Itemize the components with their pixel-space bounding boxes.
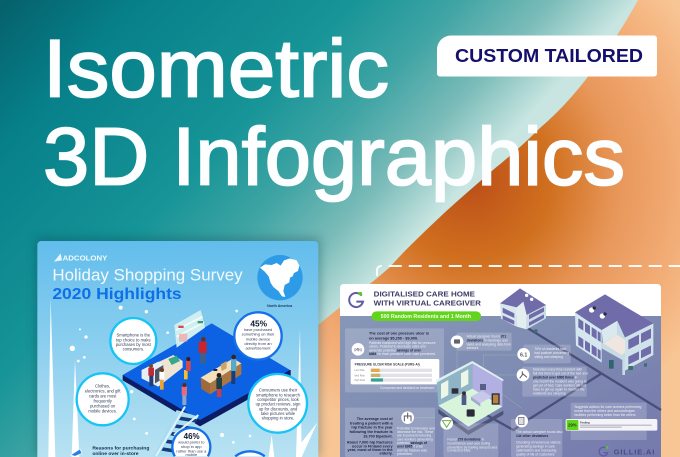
panel: 144 other deviations: optimisation and increasing	[516, 449, 556, 453]
callout: 46%: would prefer to	[178, 440, 205, 445]
card: pressure ulcer risk scale	[351, 359, 439, 384]
icon: caregiver	[517, 369, 529, 381]
panel: 279 deviations: incontinence-pad care during	[447, 441, 490, 445]
logo: gillie ai	[599, 446, 654, 457]
callout: smartphone top choice: top choice to make	[116, 337, 151, 342]
heading: digitalised care home: DIGITALISED CARE HOME	[374, 290, 475, 299]
callout: 45%: advertisement	[245, 346, 271, 351]
snow and white streaks	[48, 298, 317, 457]
panel: falls predicted	[517, 367, 588, 397]
panel: hip fractures: care workers generating	[397, 437, 433, 441]
card: pressure ulcer risk scale: Low Risk	[354, 369, 365, 372]
panel: falls predicted: fall risk tried to get out of the bed and	[533, 372, 588, 376]
panel: falls predicted: predicted over 6000 times in	[533, 376, 578, 380]
panel: 144 other deviations: quality of life of customers	[516, 453, 555, 457]
callout: consumers use smartphone	[248, 374, 307, 433]
panel: 144 other deviations: Checking of numerous visitors	[516, 441, 561, 445]
heading: 2020 highlights: 2020 Highlights	[52, 286, 182, 303]
panel: pressure ulcer cost: Compared and decided on treatment	[380, 386, 434, 390]
panel: 144 other deviations: generating savings in care	[516, 445, 555, 449]
panel: hip fractures: The average cost of	[357, 417, 393, 421]
heading: digitalised care home: WITH VIRTUAL CAREGIVER	[374, 299, 481, 308]
callout: consumers use smartphone: smartphone to research	[256, 392, 301, 397]
panel: hip fractures: potential savings of	[397, 441, 428, 445]
callout: 45%: 45%	[250, 318, 268, 328]
panel: 144 other deviations: 144 other deviations	[516, 434, 548, 438]
large building	[575, 294, 653, 375]
roads	[487, 323, 661, 430]
panel: 279 deviations	[440, 417, 498, 457]
panel: pressure ulcer cost: generate potential savings of over	[369, 348, 422, 352]
card: pressure ulcer risk scale: PRESSURE ULCER RISK SCALE (PURS-AI)	[355, 362, 420, 366]
callout: clothes electronics: mobile devices.	[88, 409, 117, 414]
title: Isometric	[43, 24, 389, 114]
badge: custom tailored: CUSTOM TAILORED	[455, 45, 643, 66]
callout: smartphone top choice: consumers.	[123, 347, 144, 352]
callout: 45%: something on their	[242, 332, 275, 337]
callout: consumers use smartphone: Consumers use their	[259, 388, 298, 393]
callout: clothes electronics: Clothes,	[95, 384, 110, 389]
callout: 45%: have purchased	[244, 327, 272, 332]
panel: falls predicted: Detected every time resident with	[533, 368, 582, 372]
panel: falls predicted: residents are sleeping.	[533, 392, 567, 396]
panel: hip fractures: Potential to intervene and	[397, 426, 435, 430]
icon: north america globe	[257, 255, 303, 308]
panel: pressure ulcer cost	[345, 328, 444, 392]
poster shadow	[36, 238, 320, 457]
callout: smartphone top choice: purchases by most	[116, 342, 152, 347]
panel: hip fractures: prevented.	[397, 452, 413, 456]
badge: custom tailored	[437, 36, 657, 76]
panel: pressure ulcer cost: The cost of one pressure ulcer is	[369, 332, 429, 336]
card: 29% finding: Finding	[580, 420, 590, 424]
panel: pressure ulcer cost: on average $5,200 - $9,000.	[369, 336, 418, 340]
icon: heart shield	[440, 417, 453, 430]
callout: clothes electronics: electronics, and gift	[85, 389, 121, 394]
title	[43, 24, 625, 202]
callout: bottom circle	[235, 451, 265, 456]
panel: residents sleeping	[517, 345, 571, 363]
panel: deviations: tasks and analysing data from	[467, 342, 511, 346]
text: reasons for purchasing: online over in-store	[92, 451, 139, 457]
panel: hip fractures: 19,700 $/patient.	[363, 434, 393, 438]
card: 29% finding: 29%	[568, 423, 577, 428]
panel: suggests actions: facilities performing better than the others	[574, 413, 636, 417]
panel: suggests actions	[566, 403, 657, 440]
callout: 45%	[234, 312, 282, 360]
panel: pressure ulcer cost: ulcers. Potential to decrease rates and	[369, 345, 426, 349]
icon: north america globe: North America	[267, 304, 293, 308]
callout: 46%: shop in app	[181, 444, 202, 449]
panel: 279 deviations: prevention by having sensors and	[447, 445, 497, 449]
panel: holiday shopping survey poster	[37, 241, 318, 457]
logo: g mark	[349, 292, 363, 307]
icon: tablet	[451, 335, 463, 348]
panel: hip fractures: hip fracture in the year	[351, 426, 393, 430]
panel: hip fractures: year, most of them in the	[348, 448, 393, 452]
callout: 46%	[172, 428, 210, 457]
card: pressure ulcer risk scale: Med Risk	[354, 374, 365, 377]
panel: falls predicted: have to get up again to monitor the	[533, 388, 585, 392]
illustration: isometric room	[436, 361, 503, 435]
panel: deviations: sensors	[467, 346, 479, 350]
callout: smartphone top choice	[110, 318, 156, 364]
callout: smartphone top choice: Smartphone is the	[116, 332, 151, 337]
logo: gillie ai: GILLIE.AI	[614, 448, 654, 457]
icon: document search	[515, 415, 528, 427]
panel: hip fractures: following the fracture is	[349, 430, 393, 434]
callout: 45%: mobile device	[246, 336, 271, 341]
panel: deviations	[451, 333, 512, 351]
panel: hip fractures: are to prevent reducing	[397, 434, 431, 438]
panel: deviations: Actual caregiver found 371	[467, 334, 506, 338]
checkout counter	[142, 355, 183, 387]
panel: hip fractures: occur in Finland every	[352, 444, 394, 448]
callout: clothes electronics: frequently	[94, 399, 113, 404]
callout: consumers use smartphone: up product reviews, sign	[256, 402, 301, 407]
callout: consumers use smartphone: take pictures while	[261, 411, 296, 416]
icon: shopping tag	[71, 449, 82, 456]
icon: walker	[401, 411, 414, 424]
sales counter	[201, 358, 241, 394]
panel: hip fractures: and hip fracture was	[397, 448, 427, 452]
icon: patient chart: pt|q	[354, 347, 362, 352]
panel: residents sleeping: 70% of residents had	[534, 347, 566, 351]
callout: consumers use smartphone: up for discounts, and	[259, 406, 298, 411]
panel: residents sleeping: bad posture concerning	[534, 351, 569, 355]
text: reasons for purchasing: Reasons for purchasing	[92, 446, 149, 452]
panel: residents sleeping: sitting and sleeping	[534, 355, 563, 359]
panel: hip fractures: elderly.	[380, 452, 393, 456]
card: pressure ulcer risk scale: High Risk	[354, 379, 366, 382]
title: 3D Infographics	[43, 112, 625, 202]
panel: pressure ulcer cost: $864 for each pressure ulcer case prevented.	[369, 352, 436, 356]
panel: 279 deviations: Found 279 deviations in	[447, 437, 484, 441]
panel: digitalised care home poster	[340, 284, 661, 457]
panel: pressure ulcer cost: Patients monitored with high risk for pressure	[369, 341, 436, 345]
callout: 46%: rather than use a	[176, 448, 207, 453]
text: reasons for purchasing	[92, 446, 149, 457]
logo: adcolony: ADCOLONY	[63, 254, 107, 263]
small building	[500, 288, 546, 333]
shelf display	[174, 310, 205, 348]
orange curved background	[300, 0, 680, 457]
heading: holiday shopping survey: Holiday Shopping Survey	[52, 266, 243, 285]
panel: 279 deviations: connected trials	[447, 449, 471, 453]
dashed frame line	[377, 266, 680, 276]
callout: clothes electronics: purchased on	[90, 404, 116, 409]
panel: hip fractures: over $965 if a fall	[397, 445, 423, 449]
card: 29% finding	[566, 419, 657, 431]
panel: hip fractures: About 7,000 hip fractures	[347, 441, 393, 445]
isometric store platform	[123, 310, 291, 426]
callout: clothes electronics: cards are most	[89, 394, 117, 399]
panel: suggests actions: worse than the others and acknowledges	[574, 409, 635, 413]
callout: 46%: 46%	[184, 432, 200, 441]
stairs	[153, 407, 198, 456]
panel: hip fractures: treating a patient with a	[350, 421, 394, 425]
panel: falls predicted: get out of bed. Care workers did not	[533, 384, 586, 388]
panel: hip fractures: decrease the risk. These	[397, 430, 434, 434]
panel: hip fractures	[345, 408, 435, 457]
callout: consumers use smartphone: shopping in store.	[262, 416, 294, 421]
panel: 144 other deviations	[511, 415, 563, 457]
icon: resident: 6.1	[520, 352, 527, 358]
connector lines	[408, 348, 522, 430]
panel: deviations: deviations in meetings and	[467, 338, 508, 342]
callout: 46%: mobile	[185, 452, 198, 457]
callout: 45%: directly from an	[244, 341, 272, 346]
panel: suggests actions: Suggests actions for care workers performing	[574, 405, 641, 409]
callout: consumers use smartphone: competitor prices, look	[257, 397, 300, 402]
callout: clothes electronics	[77, 373, 129, 425]
panel: falls predicted: one month the resident was going to	[533, 380, 587, 384]
subtitle pill: 500 Random Residents and 1 Month	[381, 314, 471, 320]
panel: 144 other deviations: The actual caregiver found also	[516, 430, 563, 434]
header band	[340, 284, 661, 321]
shoppers	[148, 337, 236, 405]
heading: digitalised care home	[374, 290, 481, 308]
subtitle pill	[372, 311, 481, 321]
